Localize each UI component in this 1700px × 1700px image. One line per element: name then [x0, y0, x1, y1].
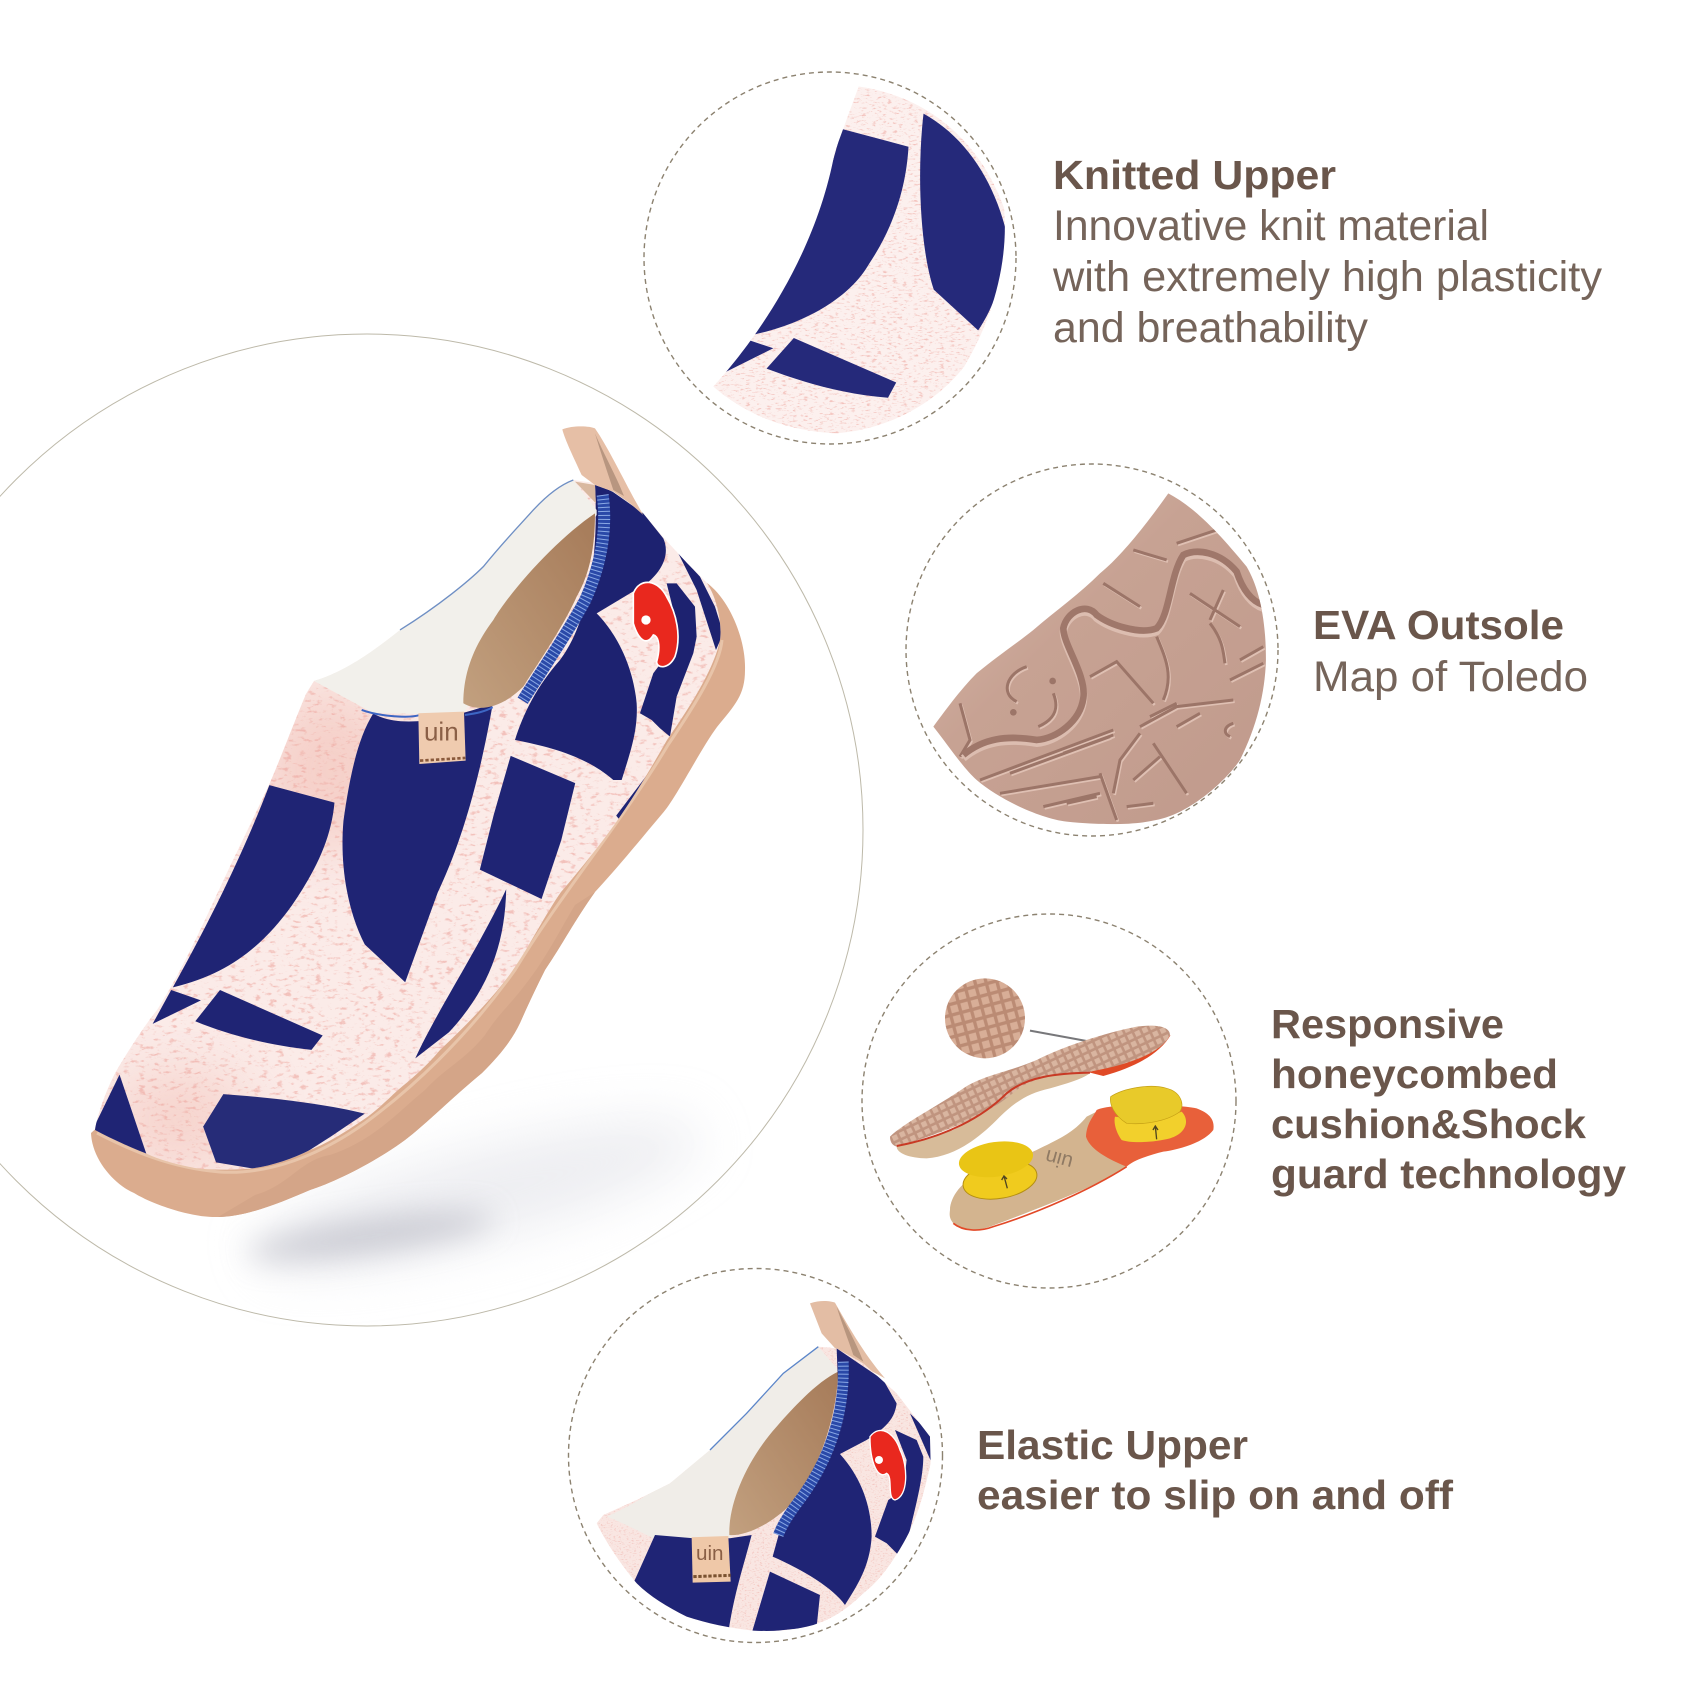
heel shoe close-up [590, 1301, 937, 1637]
lining [607, 1347, 838, 1538]
navy panel rectangle [480, 756, 575, 899]
navy panel left [173, 785, 334, 987]
knitted upper text: Knitted Upper [1053, 152, 1336, 198]
outsole lower tread [218, 892, 595, 1217]
heel counter [575, 482, 596, 503]
logo dots [1010, 678, 1056, 716]
insole [729, 1372, 838, 1535]
river highlight [963, 555, 1263, 758]
front navy panels [93, 704, 686, 1172]
elastic upper circle [568, 1268, 942, 1642]
heel navy panels [515, 485, 723, 780]
navy front panel [633, 1535, 752, 1633]
outsole close-up [930, 490, 1270, 830]
dashed ring [568, 1268, 942, 1642]
upper base colour [80, 470, 740, 1190]
elastic upper text [977, 1422, 1453, 1518]
navy rear panel [640, 583, 697, 737]
knitted upper text: with extremely high plasticity [1052, 253, 1602, 301]
navy stripe [616, 776, 646, 819]
knitted upper circle [644, 72, 1019, 444]
red palette emblem [633, 582, 678, 667]
upper insole red edge [897, 1073, 1090, 1146]
navy heel panel [773, 1348, 897, 1605]
knitted upper text [1052, 152, 1602, 352]
yellow pad heel top [1110, 1086, 1182, 1124]
honeycomb swatch [945, 978, 1025, 1058]
honeycomb text: guard technology [1271, 1151, 1626, 1197]
upper base [590, 1340, 937, 1637]
navy small wedge [153, 990, 201, 1024]
lining top edge [400, 480, 573, 630]
uin tag: uin [696, 1542, 724, 1565]
orange heel pad [1086, 1105, 1214, 1167]
speckle [590, 1340, 937, 1637]
heel details [314, 426, 678, 764]
knitted upper text: and breathability [1053, 304, 1368, 352]
uin leather tag: uin [424, 717, 459, 747]
yellow pad forefoot [960, 1155, 1040, 1205]
upper insole side [897, 1073, 1090, 1158]
honeycomb insole circle [862, 914, 1236, 1288]
honeycomb text [1271, 1001, 1626, 1197]
lining top edge [710, 1347, 818, 1450]
dashed ring [906, 464, 1278, 836]
dashed ring [862, 914, 1236, 1288]
collar stitch band [778, 1362, 843, 1535]
collar stitch band [523, 495, 604, 701]
pink wash [260, 690, 400, 850]
shoe lining [314, 480, 597, 714]
shoe ground shadow [244, 1091, 714, 1299]
upper insole top [890, 1026, 1170, 1147]
toe wash [110, 1070, 250, 1170]
lower insole [950, 1110, 1127, 1230]
sole lip highlight [97, 640, 722, 1172]
collar stitch highlights [778, 1362, 843, 1535]
elastic upper text: Elastic Upper [977, 1422, 1248, 1468]
tab fold [595, 433, 624, 496]
honeycomb text: honeycombed [1271, 1051, 1558, 1097]
clipped shoe body [590, 1340, 937, 1637]
outsole [91, 583, 745, 1217]
lower insole edge [953, 1167, 1127, 1230]
arrows [1002, 1126, 1158, 1188]
navy toe tip [93, 1075, 147, 1156]
distressed speckle [80, 470, 740, 1190]
sole surface [930, 490, 1270, 830]
main shoe illustration [80, 426, 745, 1299]
dashed ring [644, 72, 1016, 444]
collar stitch highlights [523, 495, 604, 701]
pull tab [810, 1301, 885, 1378]
navy toe panel [203, 1094, 365, 1172]
honeycomb text: Responsive [1271, 1001, 1504, 1047]
knit close-up [714, 86, 1005, 434]
insole logo: uin [1043, 1145, 1075, 1174]
elastic upper text: easier to slip on and off [977, 1472, 1453, 1518]
navy fin [415, 889, 506, 1058]
leader line [1030, 1031, 1090, 1042]
insole [463, 513, 595, 708]
navy block [752, 1572, 820, 1633]
EVA outsole circle [906, 464, 1278, 836]
navy panel centre [343, 704, 493, 982]
EVA outsole text [1313, 602, 1588, 701]
insole illustration [890, 978, 1214, 1230]
upper insole heel edge [1090, 1035, 1171, 1076]
knitted upper text: Innovative knit material [1053, 202, 1489, 250]
shoe upper [80, 470, 740, 1190]
yellow pad heel [1115, 1112, 1186, 1142]
navy rear panel [875, 1430, 923, 1557]
navy far rear panel [910, 1414, 930, 1460]
uin leather tag [418, 712, 466, 764]
honeycomb text: cushion&Shock [1271, 1101, 1586, 1147]
yellow pad forefoot top [957, 1137, 1035, 1182]
navy far rear panel [678, 553, 723, 650]
map street highlights [961, 532, 1265, 822]
front collar trim [362, 707, 493, 717]
navy heel panel [515, 485, 666, 780]
tab fold [837, 1307, 863, 1362]
navy wedge [195, 990, 323, 1050]
river channel [963, 552, 1263, 755]
EVA outsole text: EVA Outsole [1313, 602, 1564, 648]
red palette [870, 1430, 906, 1500]
big shoe circle outline [0, 334, 863, 1326]
EVA outsole text: Map of Toledo [1313, 653, 1588, 701]
heel pull tab [562, 426, 643, 515]
map streets [960, 530, 1263, 820]
uin tag [692, 1536, 731, 1583]
